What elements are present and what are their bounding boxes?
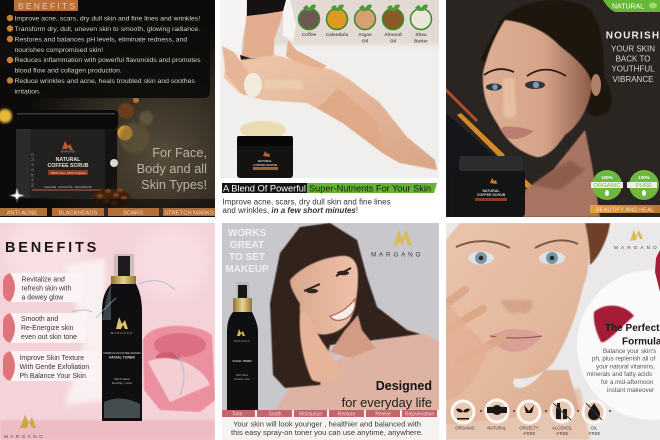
nourish heading: VIBRANCE [613, 75, 653, 84]
benefits list: Reduce wrinkles and acne, heals troubled skin and soothes [14, 78, 195, 85]
tags row [220, 410, 437, 418]
coffee scrub jar: COFFEE SCRUB [48, 163, 89, 169]
coffee scrub jar [15, 110, 118, 198]
natural badge: NATURAL [612, 4, 644, 10]
benefit 1: a dewey glow [22, 294, 63, 302]
tags row: Tone [232, 412, 243, 418]
benefits list [7, 15, 201, 95]
works great text: GREAT [230, 240, 264, 251]
certification icons: -FREE [556, 431, 568, 436]
benefit 1: Revitalize and [22, 276, 65, 284]
rose [143, 326, 215, 412]
jar [453, 156, 525, 217]
scrub jar: NATURAL [258, 159, 272, 163]
description: and wrinkles, in a few short minutes! [222, 206, 358, 215]
benefit 2 [3, 313, 86, 343]
tags row: Rejuvenation [405, 412, 434, 418]
nourish heading [606, 30, 660, 84]
formula text [587, 348, 656, 394]
natural badge [603, 0, 660, 12]
designed heading: Designed [376, 379, 432, 393]
margano logo: MARGANO [4, 434, 45, 440]
benefit 2: Re-Energize skin [21, 325, 74, 332]
woman with scrub [220, 0, 437, 170]
benefit 1 [3, 273, 83, 302]
coffee scrub jar: MARGANO [61, 150, 76, 154]
tags row: ANTI ACNE [7, 210, 37, 216]
panel: facial toner benefits [0, 215, 215, 440]
coffee scrub jar: CLEANSE · EXFOLIATE · REJUVENATE [44, 185, 92, 189]
sparkle [10, 188, 24, 203]
description [231, 420, 423, 437]
panel: nourish [446, 0, 660, 217]
description [222, 198, 390, 214]
benefits list: irritation. [14, 88, 41, 96]
scrub jar [237, 121, 293, 178]
margano logo: MARGANO [371, 252, 423, 258]
tagline: For Face, [152, 145, 207, 160]
ingredient icons: Almond [384, 32, 402, 37]
benefit 3 [3, 351, 97, 381]
works great text: TO SET [229, 252, 265, 263]
description: Improve acne, scars, dry dull skin and fine lines [222, 198, 391, 206]
ingredient icons: Calendula [326, 32, 349, 37]
beautify bar: BEAUTIFY AND HEAL [596, 208, 655, 214]
organic badge: ORGANIC [593, 183, 621, 189]
rose petals [594, 250, 660, 342]
formula text: minerals and fatty acids [587, 371, 652, 378]
ingredient icons: Argan [358, 32, 372, 37]
margano logo [372, 230, 420, 256]
ingredient icons: Butter [414, 38, 428, 44]
tags row: STRETCH MARKS [164, 210, 214, 216]
benefit 3: Ph Balance Your Skin [20, 373, 86, 380]
pure badge: 100% [638, 175, 650, 180]
ingredient icons: Oil [390, 38, 396, 44]
coffee scrub jar: NATURAL [56, 157, 81, 163]
formula text: your natural vitamins, [596, 364, 655, 370]
headline bar: Super-Nutrients For Your Skin [309, 184, 431, 194]
coffee scrub jar: MARGANO [30, 151, 35, 187]
smiling model [270, 223, 440, 412]
nourish heading: YOUTHFUL [611, 64, 655, 74]
benefit 2: Smooth and [21, 316, 58, 323]
benefits list: blood flow and collagen production. [14, 68, 122, 74]
formula text: for a mid-afternoon [601, 379, 654, 386]
certification icons: ORGANIC [455, 426, 475, 430]
tags row [0, 208, 215, 216]
accent stripes [446, 88, 532, 189]
tagline [137, 145, 207, 192]
organic badge [591, 170, 623, 200]
tags row: Revive [375, 412, 391, 418]
benefits list: Transform dry, dull, uneven skin to smooth, glowing radiance. [14, 26, 200, 33]
model face [446, 223, 610, 440]
bubble background [577, 270, 660, 420]
benefit 2: even out skin tone [21, 334, 77, 341]
ingredient icons: Oil [362, 38, 368, 44]
ingredient icons: Shea [415, 32, 427, 37]
benefits tag: BENEFITS [18, 1, 75, 11]
toner bottle: Rosehip + Aloe [112, 381, 132, 385]
headline bar: A Blend Of Powerful [223, 184, 306, 194]
toner bottle: Witch Hazel [114, 377, 130, 381]
benefits title: BENEFITS [5, 240, 99, 256]
panel: super-nutrients [220, 0, 445, 217]
works great text [226, 229, 268, 272]
coffee beans [91, 188, 131, 207]
margano logo [614, 230, 660, 251]
nourish heading: NOURISH [606, 30, 660, 42]
tagline: Skin Types! [141, 177, 207, 192]
panel: works great [220, 223, 440, 440]
jar: NATURAL [482, 189, 500, 193]
margano logo: MARGANO [614, 245, 660, 251]
toner bottle [102, 254, 142, 421]
benefits list: nourishes compromised skin! [14, 47, 103, 54]
tags row: Sooth [268, 412, 282, 418]
certification icons: CRUELTY [519, 426, 539, 430]
tags row: Moisturize [299, 412, 322, 418]
formula text: ph, plus replenish all of [592, 356, 656, 362]
tags row: Restore [338, 412, 355, 418]
margano logo [4, 415, 42, 438]
formula text: Balance your skin's [603, 348, 656, 355]
toner bottle: Witch Hazel [236, 374, 249, 377]
pure badge: PURE [636, 183, 652, 189]
beautify bar [590, 205, 660, 214]
certification icons: NATURAL [487, 426, 507, 430]
toner bottle: FACIAL TONER [109, 356, 135, 360]
tags row: SCARS [123, 210, 143, 216]
headline bar [222, 183, 437, 194]
jar: COFFEE SCRUB [477, 193, 506, 197]
water splash [72, 281, 184, 395]
toner bottle: MARGANO [111, 331, 133, 335]
toner bottle: MARGANO [234, 340, 250, 343]
tags row: BLACKHEADS [59, 210, 98, 216]
designed heading: for everyday life [342, 395, 432, 410]
benefit 3: Improve Skin Texture [20, 355, 84, 362]
benefits list: Reduces inflammation with powerful flavonoids and promotes [14, 57, 201, 64]
formula heading [605, 323, 660, 348]
certification icons: -FREE [523, 431, 535, 436]
works great text: WORKS [228, 228, 266, 239]
benefits list: Restores and balances pH levels, eliminate redness, and [14, 36, 187, 44]
formula heading: The Perfect [605, 323, 660, 334]
works great text: MAKEUP [225, 264, 269, 275]
scrub jar: COFFEE SCRUB [253, 163, 278, 167]
organic badge: 100% [601, 175, 613, 180]
tagline: Body and all [137, 161, 207, 176]
ingredient icons [298, 4, 432, 44]
benefit 3: With Gentle Exfoliation [20, 364, 89, 371]
certification icons: OIL [591, 426, 598, 430]
nourish heading: YOUR SKIN [611, 44, 655, 54]
panel: coffee scrub benefits [0, 0, 215, 217]
coffee scrub jar: 100% Pure, 100% Organic [50, 171, 86, 175]
formula text: instant makeover [607, 387, 654, 394]
certification icons [450, 398, 611, 436]
certification icons: -FREE [588, 431, 600, 436]
description: Your skin will look younger , healthier and balanced with [233, 420, 421, 428]
toner bottle: Rosehip + Aloe [234, 378, 250, 381]
pure badge [627, 170, 659, 200]
panel: perfect formula [446, 223, 660, 440]
benefits dark box [0, 0, 210, 98]
benefit 1: refresh skin with [22, 286, 71, 292]
benefits list: Improve acne, scars, dry dull skin and fine lines and wrinkles! [14, 16, 200, 22]
ingredient icons: Coffee [302, 32, 317, 37]
model portrait [480, 0, 611, 217]
nourish heading: BACK TO [616, 54, 650, 64]
certification icons: ALCOHOL [552, 426, 573, 430]
toner bottle: FACIAL TONER [232, 359, 252, 363]
designed heading [342, 379, 432, 410]
toner bottle [227, 282, 258, 410]
description: this easy spray-on toner you can use anytime, anywhere. [231, 428, 423, 437]
toner bottle: MOROCCAN ROSE WATER [103, 351, 141, 355]
